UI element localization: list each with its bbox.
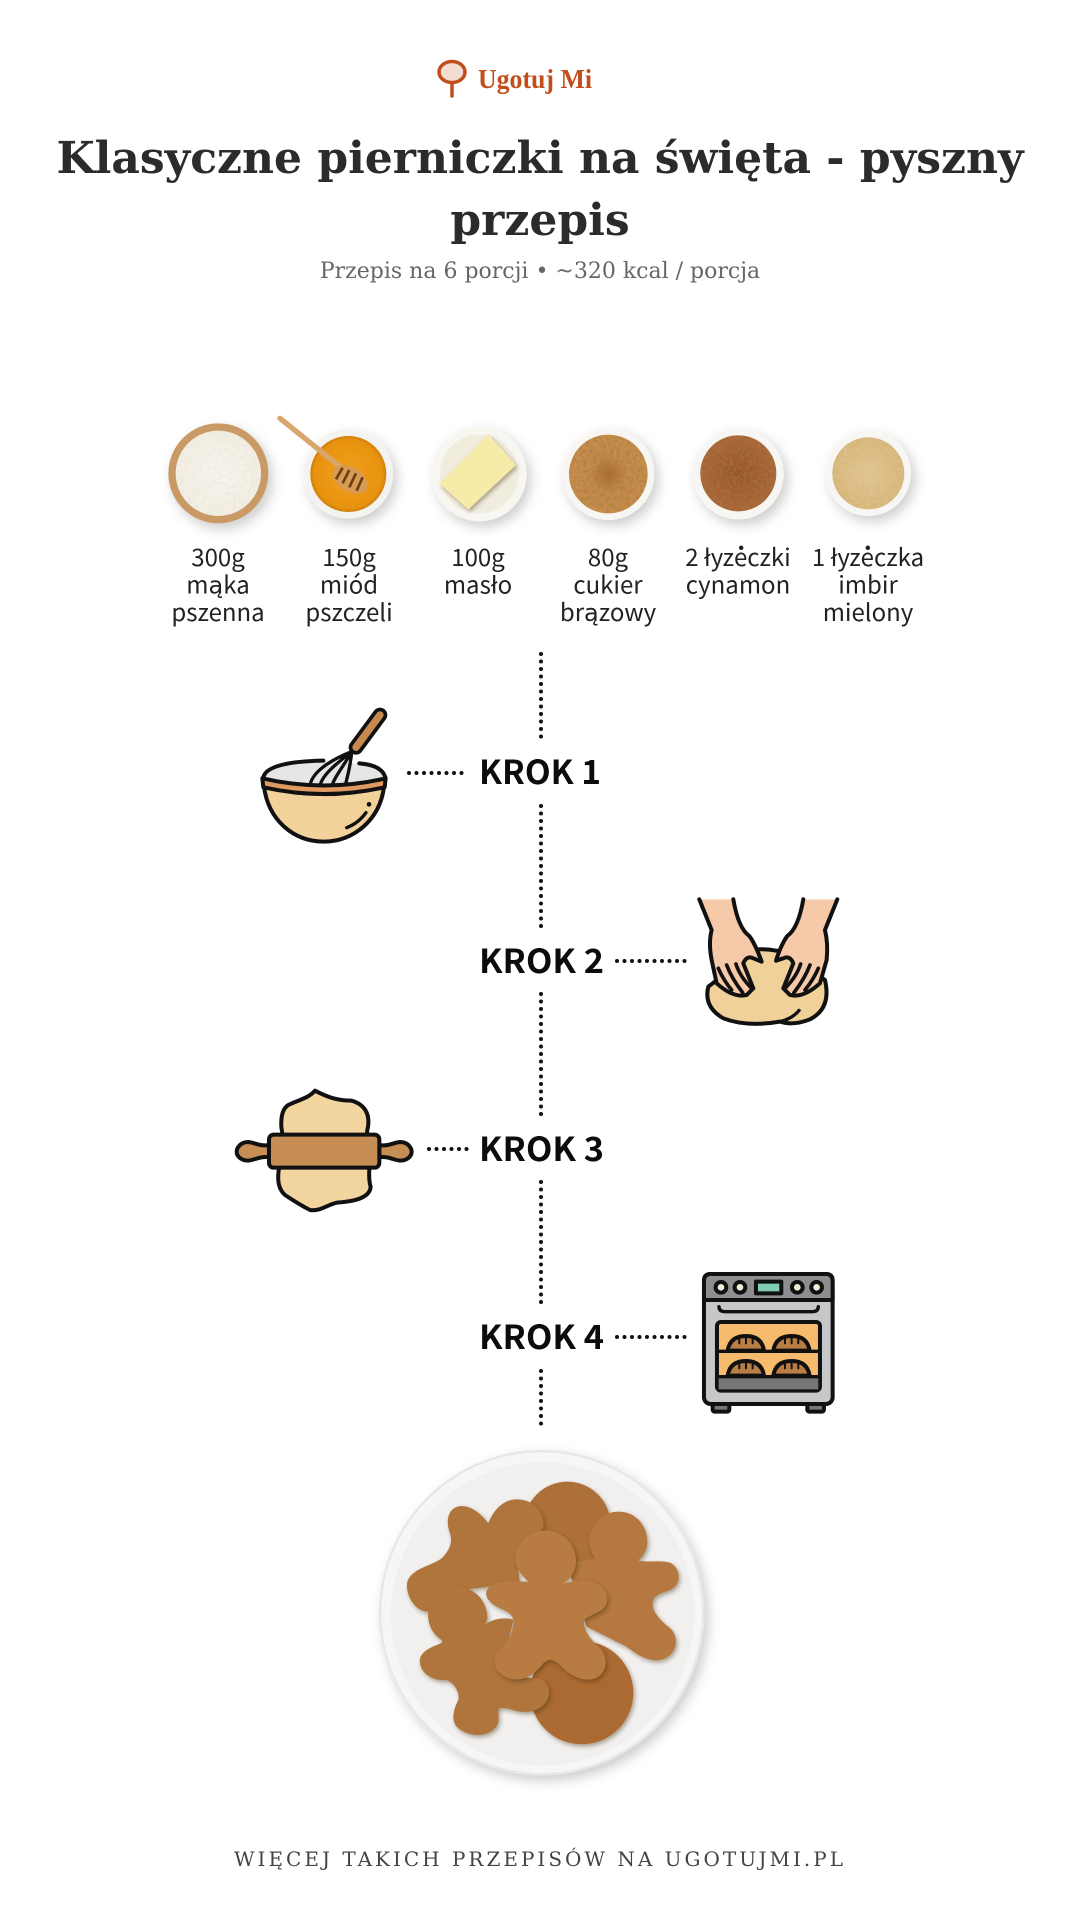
icon: hands kneading dough bbox=[699, 899, 837, 1024]
ingredient: butter bbox=[432, 427, 527, 600]
cookie: right man bbox=[567, 1512, 679, 1660]
sugar label: cukier bbox=[573, 566, 643, 600]
flour bowl image bbox=[168, 423, 268, 523]
butter label: masło bbox=[444, 566, 512, 600]
title: przepis bbox=[450, 195, 630, 246]
step label: KROK 1 bbox=[479, 746, 601, 794]
connector bbox=[409, 771, 468, 775]
honey label: 150g bbox=[322, 538, 376, 573]
ginger bowl image bbox=[826, 431, 911, 516]
cookie: round bottom bbox=[530, 1641, 633, 1744]
step 2 bbox=[479, 899, 837, 1024]
step 1 bbox=[262, 715, 601, 842]
connector bbox=[617, 1335, 686, 1339]
cinnamon label: cynamon bbox=[686, 566, 790, 600]
cookie: lower left man bbox=[420, 1587, 549, 1735]
step label: KROK 2 bbox=[479, 935, 604, 983]
ginger label: imbir bbox=[838, 566, 898, 600]
final dish: plate of gingerbread cookies bbox=[379, 1450, 704, 1775]
footer: WIĘCEJ TAKICH PRZEPISÓW NA UGOTUJMI.PL bbox=[234, 1846, 846, 1871]
flour label: 300g bbox=[191, 538, 245, 573]
ingredient: honey bbox=[280, 418, 393, 628]
title: Klasyczne pierniczki na święta - pyszny bbox=[56, 133, 1025, 184]
icon: oven bbox=[704, 1274, 833, 1412]
icon: bowl with whisk bbox=[262, 715, 386, 842]
flour label: mąka bbox=[186, 566, 250, 600]
connector bbox=[617, 959, 686, 963]
cookie: upper left man bbox=[407, 1499, 543, 1612]
ingredient: brown sugar bbox=[560, 428, 657, 628]
logo: Ugotuj Mi bbox=[439, 62, 592, 96]
honey bowl image bbox=[280, 418, 393, 519]
ginger label: mielony bbox=[823, 593, 914, 628]
plate bbox=[379, 1450, 704, 1775]
honey label: pszczeli bbox=[305, 593, 393, 628]
icon: rolling pin on dough bbox=[237, 1091, 412, 1210]
cookie: center man bbox=[486, 1531, 607, 1680]
ingredient: flour bbox=[168, 423, 268, 628]
ginger label: 1 łyżeczka bbox=[812, 538, 924, 573]
vertical dotted timeline bbox=[539, 654, 543, 1428]
step 4 bbox=[479, 1274, 833, 1412]
butter plate image bbox=[432, 427, 527, 521]
icon: spoon bbox=[439, 62, 465, 96]
cinnamon bowl image bbox=[693, 429, 784, 519]
step label: KROK 3 bbox=[479, 1123, 604, 1171]
step label: KROK 4 bbox=[479, 1311, 604, 1359]
cinnamon label: 2 łyżeczki bbox=[685, 538, 791, 573]
sugar bowl image bbox=[562, 428, 654, 520]
logo wordmark: Ugotuj Mi bbox=[478, 64, 592, 94]
butter label: 100g bbox=[451, 538, 505, 573]
cookie: round top bbox=[524, 1482, 611, 1568]
sugar label: 80g bbox=[588, 538, 629, 573]
step 3 bbox=[237, 1091, 604, 1210]
subtitle: Przepis na 6 porcji • ~320 kcal / porcja bbox=[320, 259, 760, 284]
flour label: pszenna bbox=[171, 593, 265, 628]
sugar label: brązowy bbox=[560, 593, 657, 628]
ingredient: cinnamon bbox=[685, 429, 791, 600]
connector bbox=[429, 1147, 468, 1151]
honey label: miód bbox=[320, 566, 378, 600]
ingredient: ginger bbox=[812, 431, 924, 628]
